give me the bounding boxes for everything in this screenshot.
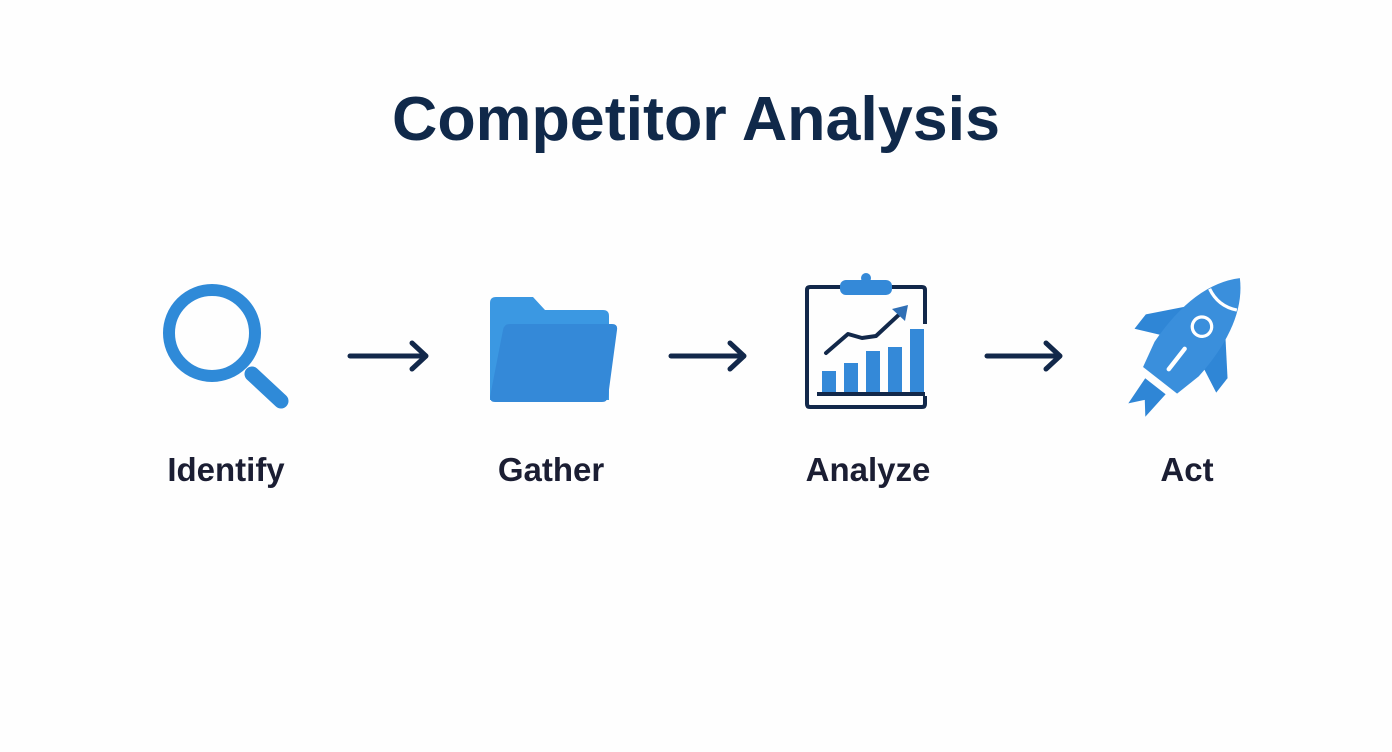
arrow 3 xyxy=(987,343,1060,369)
label: Identify: Identify xyxy=(167,451,285,488)
icon: rocket xyxy=(1096,246,1281,442)
icon: folder xyxy=(490,297,617,402)
icon: magnifier xyxy=(169,290,281,401)
arrow 2 xyxy=(671,343,744,369)
title: Competitor Analysis xyxy=(392,85,1000,154)
icon: clipboard chart xyxy=(807,273,925,407)
label: Analyze: Analyze xyxy=(806,451,930,488)
label: Act: Act xyxy=(1160,451,1214,488)
label: Gather: Gather xyxy=(498,451,604,488)
arrow 1 xyxy=(350,343,426,369)
